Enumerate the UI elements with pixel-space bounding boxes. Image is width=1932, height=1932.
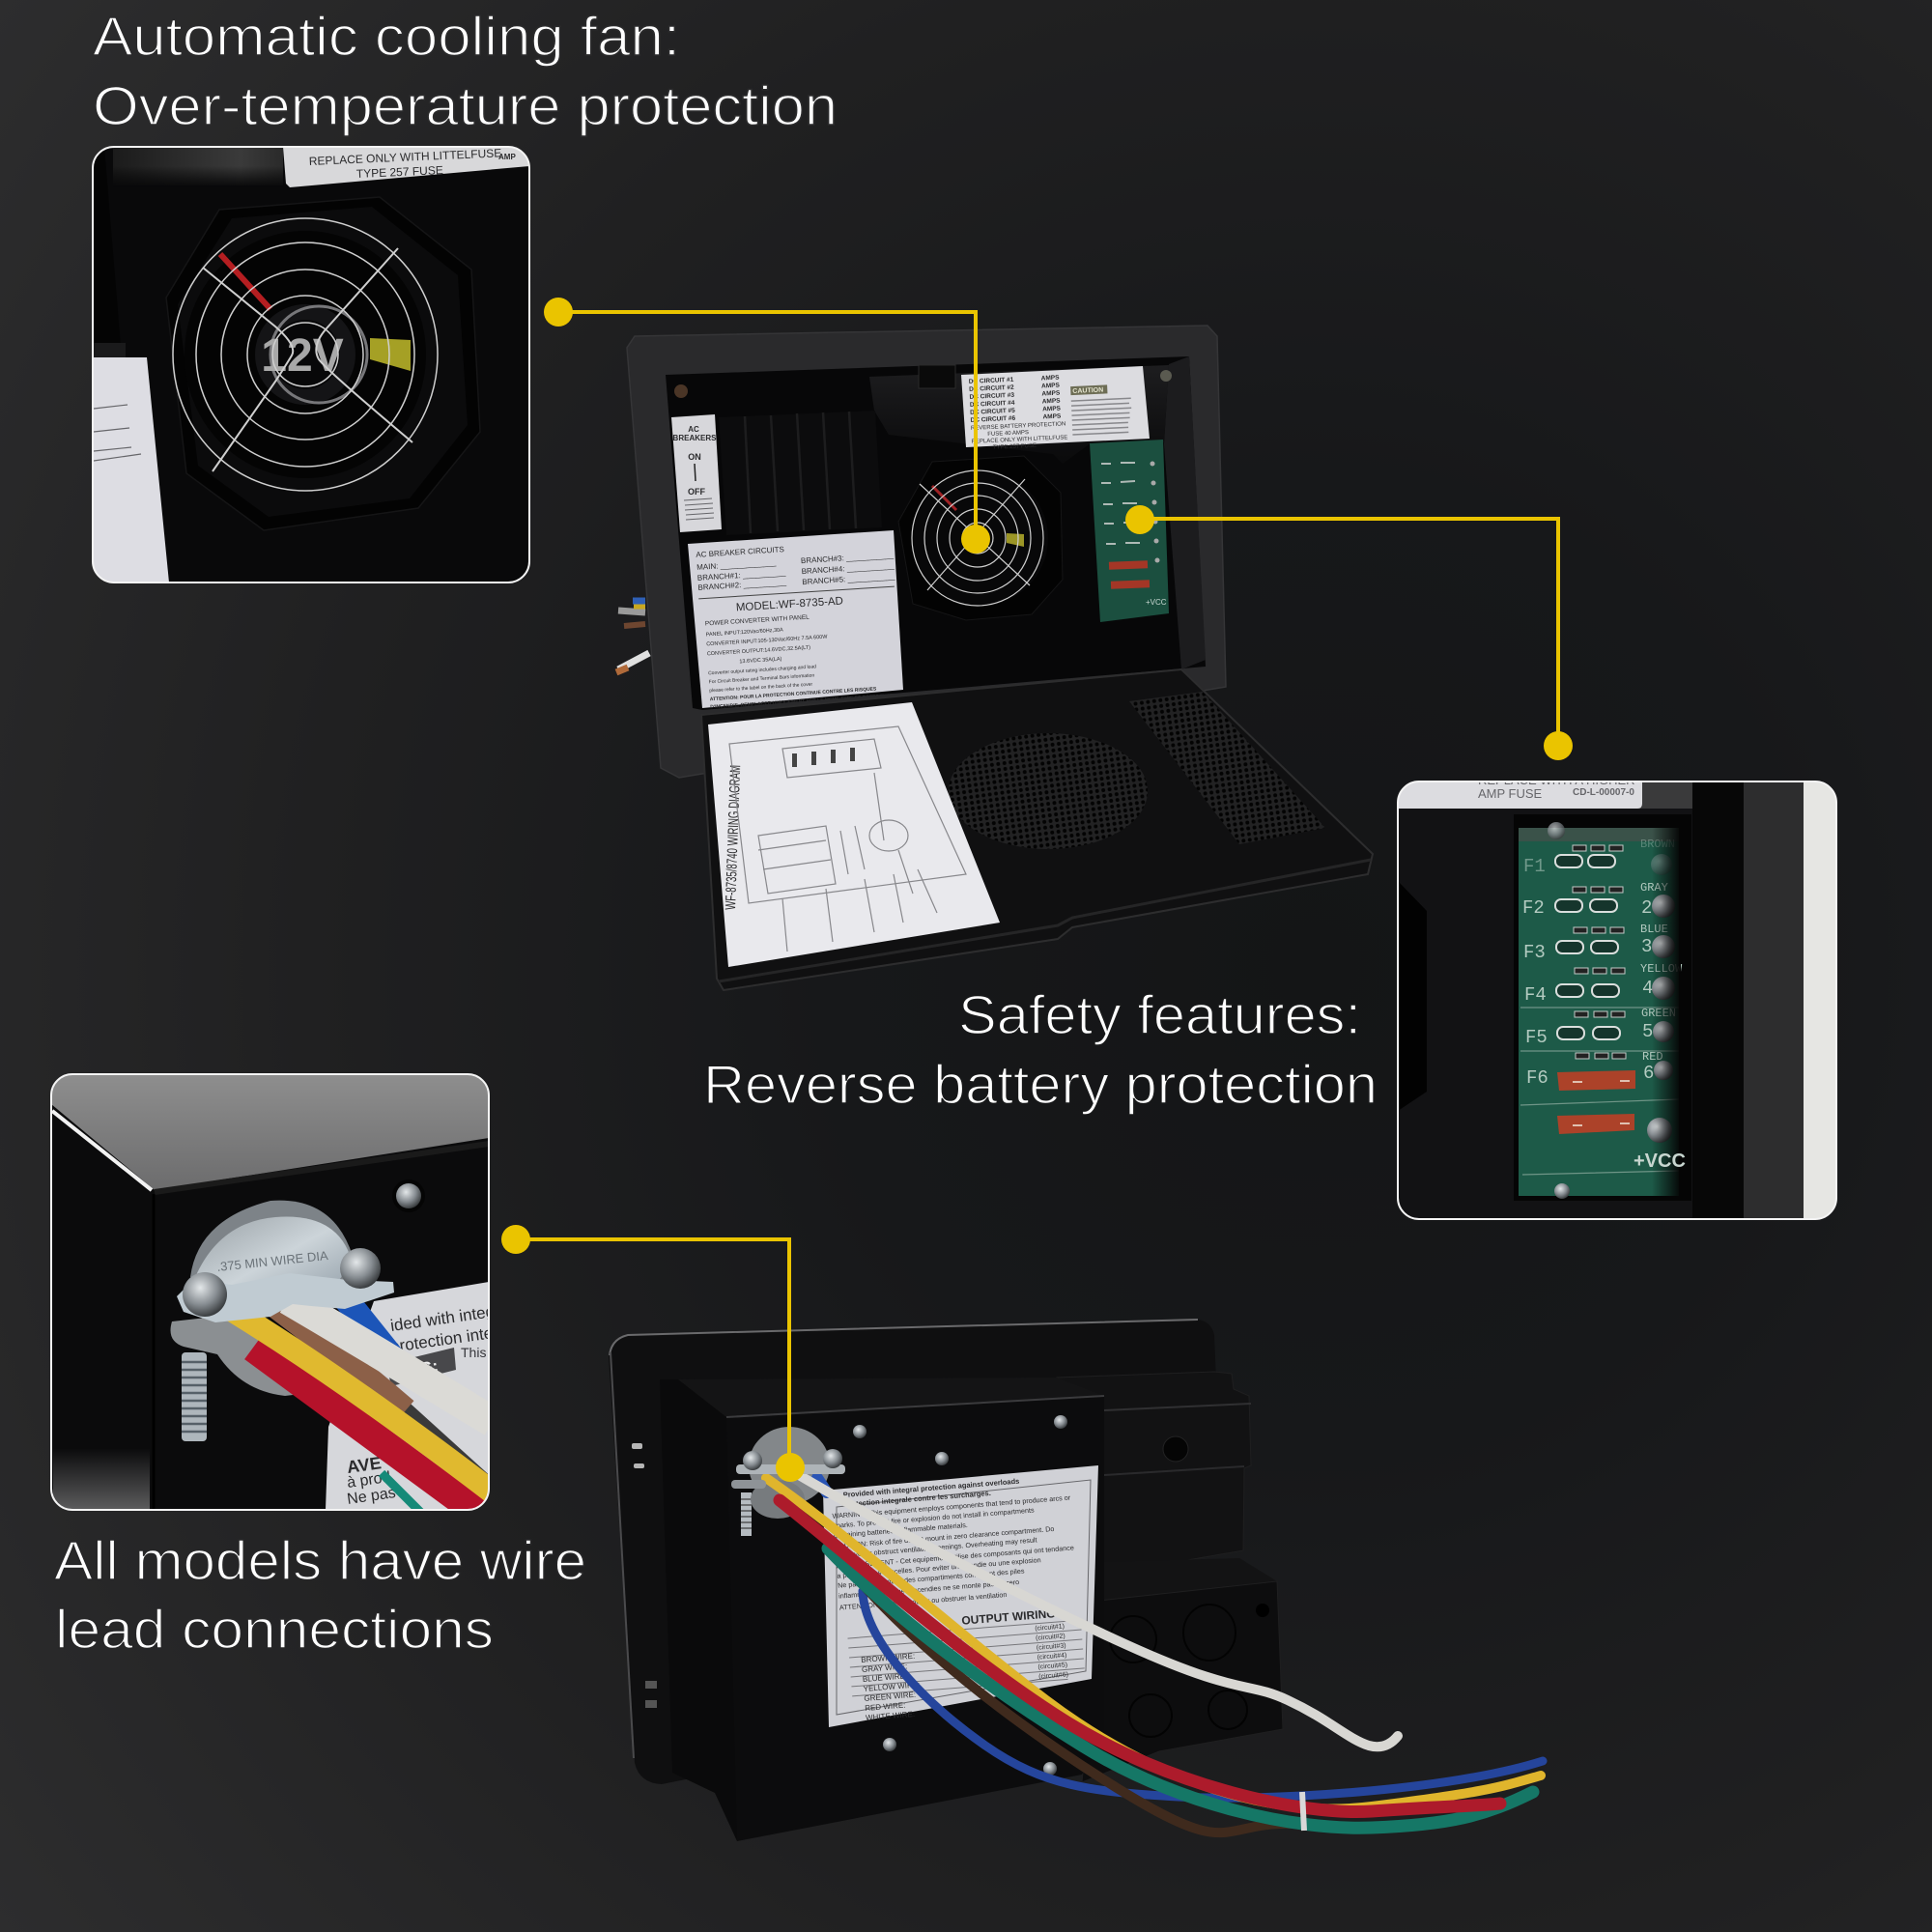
fuse designators: F1: [1523, 856, 1546, 877]
heading: wire lead connections: All models have wire: [54, 1530, 586, 1592]
heading: safety features: Safety features:: [958, 984, 1361, 1046]
model label: BRANCH#4: ___________: [801, 561, 895, 576]
outer bezel: [627, 326, 1226, 778]
heading: wire lead connections: [54, 1530, 586, 1661]
rear rating label: BLUE WIRE:: [863, 1671, 907, 1684]
DC circuit label: CAUTION: [1072, 387, 1103, 395]
callout line: fan: [544, 298, 990, 554]
12V hub text: 12V: [261, 330, 344, 382]
rear rating label: WHITE WIRE:: [866, 1710, 915, 1722]
DC circuit label: REVERSE BATTERY PROTECTION: [971, 421, 1065, 432]
left white label: [94, 357, 169, 582]
circuit board: [1519, 822, 1686, 1200]
yellow fan sticker: [370, 338, 411, 371]
top face of box: [51, 1074, 489, 1190]
rating label: [326, 1282, 488, 1509]
rear rating label: ATTENTION: NE PAS couvrir ou obstruer la ventilation: [839, 1590, 1008, 1612]
box screws: [853, 1415, 1067, 1776]
rating label: protection integ: [389, 1322, 503, 1356]
rear rating label: [823, 1465, 1098, 1727]
AC breakers label: ON: [688, 452, 701, 462]
fuse designators: F4: [1524, 984, 1547, 1006]
interior: [666, 356, 1206, 710]
top label strip: REPLACE WITH A HIGHER: [1478, 773, 1635, 787]
rear rating label: YELLOW WIRE:: [863, 1680, 921, 1693]
right inner wall: [1164, 356, 1206, 669]
wiring diagram sheet: WF-8735/8740 WIRING DIAGRAM: [723, 765, 744, 910]
heading: wire lead connections: lead connections: [55, 1599, 494, 1661]
heading: automatic cooling fan: [93, 6, 838, 137]
clamp strap: [177, 1201, 394, 1322]
callout line: fuse board: [1125, 505, 1573, 760]
fuse designators: 2: [1641, 897, 1652, 919]
model label: POWER CONVERTER WITH PANEL: [705, 614, 810, 627]
rating label: This: [461, 1345, 486, 1360]
rear rating label: (circuit#2): [1036, 1633, 1065, 1642]
rear rating label: (circuit#3): [1037, 1642, 1066, 1652]
DC circuit label: AMPS: [1041, 383, 1061, 389]
DC circuit label: DC CIRCUIT #4: [970, 400, 1015, 409]
model label: BRANCH#3: ___________: [801, 551, 895, 565]
AC breakers label: BREAKERS: [673, 434, 717, 442]
hinged lid: [701, 669, 1373, 990]
fuse designators: 3: [1641, 936, 1652, 957]
rear rating label: Provided with integral protection against overloads: [842, 1477, 1020, 1499]
rear rating label: containing batteries or flammable materials.: [834, 1520, 968, 1540]
left bracket shape: [1398, 881, 1427, 1111]
fuse label strip: AMP: [498, 153, 516, 161]
model label: BRANCH#5: ___________: [802, 572, 895, 586]
wire colour names: BROWN: [1640, 838, 1675, 851]
wiring diagram sheet: [708, 702, 1000, 967]
box screw: [396, 1183, 421, 1208]
rear rating label: RED WIRE:: [865, 1701, 906, 1713]
recess: [1514, 814, 1691, 1201]
red blade fuses: [1557, 1070, 1635, 1134]
wire colour names: GREEN: [1641, 1007, 1676, 1020]
wire colour names: RED: [1642, 1050, 1663, 1064]
upper stepped housing: [1057, 1372, 1251, 1575]
lower clamp plate: [170, 1318, 294, 1396]
rating label: UNG:: [395, 1356, 440, 1383]
rear rating label: OUTPUT WIRING:: [961, 1606, 1060, 1628]
wire clamp strap: [731, 1449, 845, 1489]
heading: safety features: [703, 984, 1378, 1116]
DC circuit label: AMPS: [1042, 398, 1061, 405]
top label strip: CD-L-00007-0: [1573, 787, 1634, 798]
threaded clamp bolt: [741, 1492, 752, 1536]
model label: Converter output rating includes charging and load: [708, 664, 816, 676]
wire colour names: BLUE: [1640, 923, 1668, 936]
DC circuit label: AMPS: [1041, 375, 1060, 382]
model label: ATTENTION: POUR LA PROTECTION CONTINUE CONTRE LES RISQUES: [710, 686, 877, 702]
lower junction box: [1082, 1558, 1283, 1782]
DC circuit label: TYPE 257 FUSE: [993, 443, 1037, 451]
rear rating label: Protection integrale contre les surcharges.: [843, 1489, 991, 1509]
model label: please refer to the label on the back of the cover: [709, 682, 813, 694]
AC breakers label: OFF: [688, 487, 705, 497]
panel: fuse board close-up: [1398, 773, 1836, 1219]
model label: 13.6VDC 35A(LA): [739, 657, 782, 665]
DC circuit label: [961, 366, 1150, 452]
product: open converter panel, front view: [616, 326, 1373, 990]
mounting flange: [609, 1320, 1219, 1784]
rear rating label: (circuit#6): [1038, 1671, 1068, 1681]
DC circuit label: REPLACE ONLY WITH LITTELFUSE: [971, 435, 1067, 445]
clamp strap: .375 MIN WIRE DIA: [216, 1248, 329, 1274]
green terminal board: [1090, 440, 1169, 622]
rear rating label: a produire des etincelles. Pour eviter un incendie ou une explosion: [837, 1555, 1041, 1580]
fuse designators: F2: [1522, 897, 1545, 919]
coloured wires: [766, 1475, 1543, 1833]
rear rating label: GREEN WIRE:: [864, 1690, 916, 1703]
rating label: ided with integral: [389, 1299, 514, 1335]
panel: cooling fan close-up: [93, 146, 529, 582]
product: converter rear view with wires: [609, 1320, 1543, 1841]
flange slots: [632, 1443, 657, 1708]
SMD resistors: [1573, 845, 1626, 1059]
threaded bolt: [182, 1352, 207, 1441]
rear rating label: inflammables. Risque d'incendies ne se monte pas en zero: [838, 1577, 1019, 1601]
cooling fan: [898, 456, 1063, 620]
frame: cooling fan panel border: [93, 147, 529, 582]
heading: automatic cooling fan: Automatic cooling fan:: [93, 6, 680, 68]
rear rating label: AVERTISSEMENT - Cet equipement utilise des composants qui ont tendance: [836, 1543, 1074, 1571]
clamp screws: [183, 1248, 381, 1317]
red fan wire: [220, 254, 270, 309]
fan grille: [173, 218, 438, 491]
rating label: Ne pas: [346, 1485, 397, 1508]
rating label: à prod: [346, 1469, 391, 1492]
fuse label strip: [283, 146, 529, 187]
DC circuit label: AMPS: [1042, 413, 1062, 420]
rating label: AVE: [346, 1453, 383, 1477]
rear rating label: (circuit#1): [1035, 1623, 1065, 1633]
rear rating label: (circuit#5): [1037, 1662, 1067, 1671]
fuse designators: 6: [1643, 1063, 1654, 1084]
terminal screws: [1548, 822, 1675, 1199]
top label strip: AMP FUSE: [1478, 786, 1543, 801]
DC circuit label: FUSE 40 AMPS: [987, 430, 1029, 438]
fan housing: [166, 197, 480, 530]
lid front lip: [719, 860, 1371, 981]
frame: wire clamp panel border: [51, 1074, 489, 1510]
cable tie: [1302, 1792, 1304, 1831]
main box rear face: [726, 1396, 1104, 1841]
top label strip: [1399, 782, 1692, 809]
callout line: wire clamp: [501, 1225, 805, 1482]
model label: D'INCENDIE, REMPLACER UNIQUEMENT PAR LE MEME TYPE ET COTES FUSE: [710, 693, 894, 710]
fuse label strip: TYPE 257 FUSE: [356, 163, 443, 181]
model label: PANEL INPUT:120Vac/60Hz,30A: [705, 627, 783, 638]
heading: safety features: Reverse battery protection: [703, 1054, 1378, 1116]
DC circuit label: DC CIRCUIT #6: [970, 415, 1016, 424]
DC circuit label: DC CIRCUIT #1: [969, 377, 1014, 385]
wire colour names: GRAY: [1640, 881, 1668, 895]
AC breakers label: [671, 414, 722, 532]
DC circuit label: DC CIRCUIT #3: [969, 392, 1015, 401]
wire colour names: [1640, 838, 1683, 1064]
frame: fuse board panel border: [1398, 781, 1836, 1219]
lower left reflection: [53, 1455, 150, 1509]
fuse designators: [1522, 856, 1654, 1089]
rear rating label: WARNING: This equipment employs components that tend to produce arcs or: [832, 1493, 1071, 1520]
DC circuit label: DC CIRCUIT #5: [970, 408, 1015, 416]
DC circuit label: AMPS: [1041, 390, 1061, 397]
fuse cover screws: [674, 384, 688, 398]
wire colour names: YELLOW: [1640, 962, 1683, 976]
rear rating label: BROWN WIRE:: [861, 1652, 916, 1664]
main box top face: [678, 1378, 1104, 1417]
model label: For Circuit Breaker and Terminal Bars information: [709, 672, 815, 685]
fuse designators: F3: [1523, 942, 1546, 963]
model label: AC BREAKER CIRCUITS: [696, 545, 784, 559]
model label: CONVERTER OUTPUT:14.6VDC,32.5A(LT): [707, 645, 810, 657]
DC circuit label: DC CIRCUIT #2: [969, 384, 1014, 393]
rear rating label: CAUTION: Risk of fire do not mount in zero clearance compartment. Do: [835, 1524, 1055, 1550]
fuse label strip: REPLACE ONLY WITH LITTELFUSE: [309, 146, 502, 168]
clamp disc: [749, 1427, 830, 1519]
box corner: [153, 1194, 155, 1510]
fuse designators: 5: [1642, 1021, 1653, 1042]
rear rating label: not cover or obstruct ventilating openings. Overheating may result: [835, 1535, 1037, 1560]
VCC marking: +VCC: [1634, 1151, 1686, 1172]
panel: wire lead clamp close-up: [51, 1074, 514, 1517]
rear rating label: Ne pas installer dans des compartiments contenant des piles: [838, 1566, 1025, 1590]
rear rating label: (circuit#4): [1037, 1652, 1067, 1662]
right black rail and cover: [1692, 781, 1836, 1219]
green terminal board: +VCC: [1146, 598, 1167, 607]
red fuses: [1109, 560, 1148, 570]
heading: automatic cooling fan: Over-temperature protection: [93, 75, 838, 137]
rectangular vent: [1129, 692, 1325, 844]
round vent: [949, 733, 1148, 849]
fuse clips: [1555, 855, 1620, 1039]
model label: BRANCH#2: __________: [697, 578, 787, 592]
switch: [919, 365, 955, 388]
AC breakers label: AC: [688, 425, 699, 434]
model label: BRANCH#1: __________: [697, 568, 786, 582]
fuse designators: 4: [1642, 978, 1653, 999]
main box side: [660, 1379, 737, 1841]
model label: [688, 530, 903, 711]
model label: CONVERTER INPUT:105-130Vac/60Hz 7.5A 600W: [706, 635, 828, 647]
rear rating label: sparks. To prevent fire or explosion do not install in compartments: [833, 1506, 1035, 1530]
fuse designators: F6: [1526, 1067, 1548, 1089]
DC circuit label: AMPS: [1042, 406, 1062, 412]
rear rating label: GRAY WIRE:: [862, 1662, 908, 1674]
fuse designators: F5: [1525, 1027, 1548, 1048]
model label: MAIN: _____________: [696, 558, 777, 572]
wire stubs at left: [616, 601, 649, 672]
breaker block: [719, 411, 882, 535]
model label: MODEL:WF-8735-AD: [736, 595, 843, 613]
upper interior sheen: [869, 365, 1169, 464]
wire bundle: [230, 1299, 493, 1517]
